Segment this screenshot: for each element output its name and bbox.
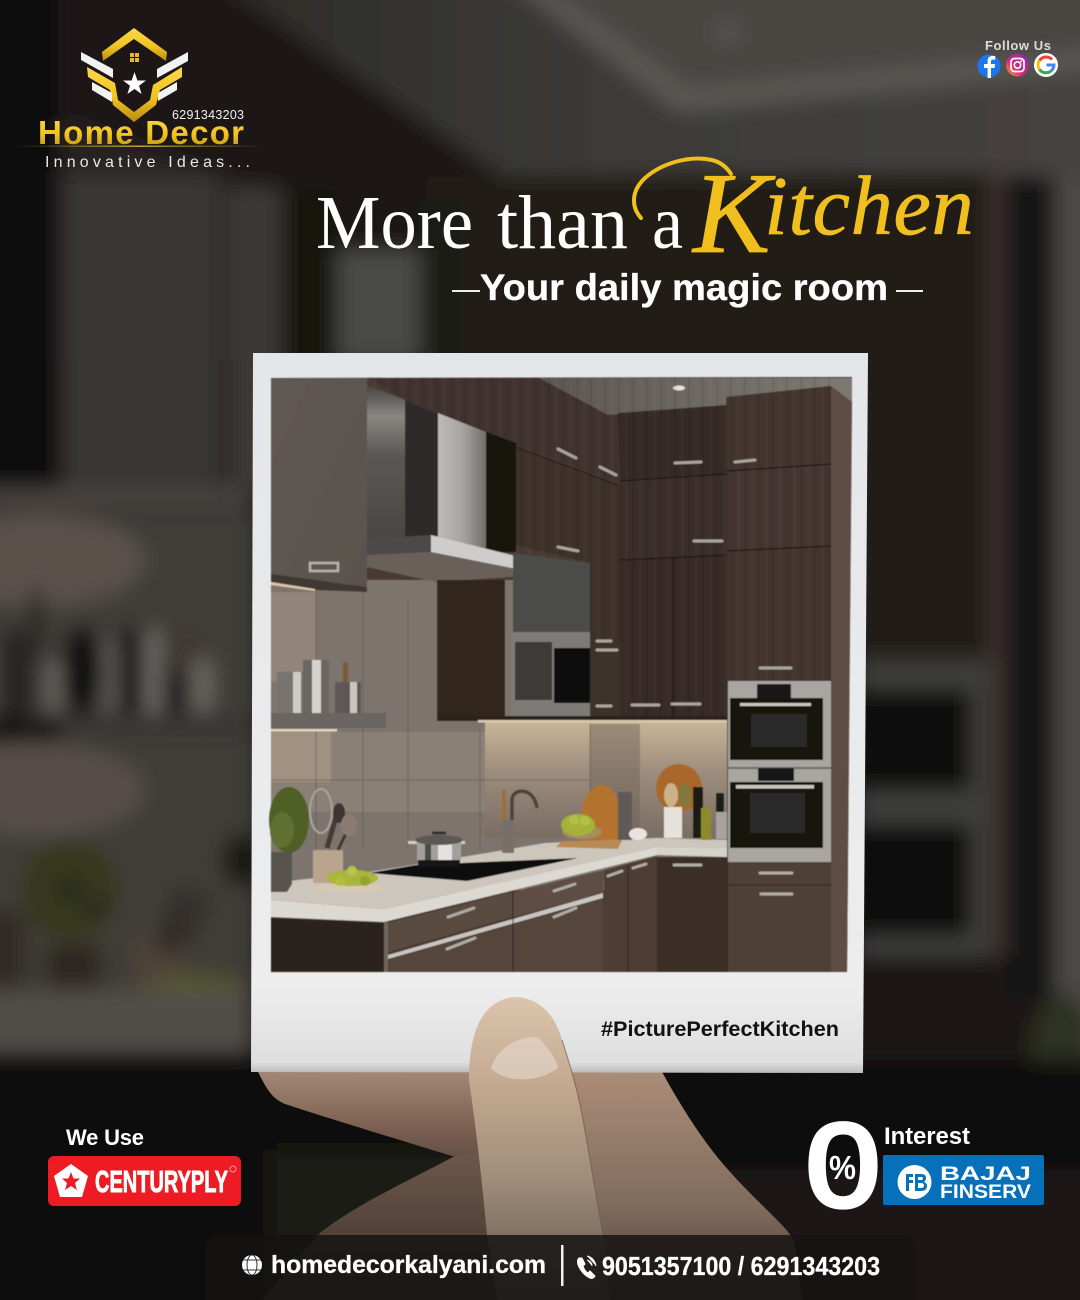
thumb over the card (469, 997, 610, 1300)
logo name: Home Decor (38, 114, 244, 151)
phone numbers: 9051357100 / 6291343203 (602, 1251, 880, 1281)
title line: More than a: a (652, 181, 683, 265)
contact bar (205, 1235, 915, 1300)
Bajaj Finserv logo: BAJAJ (940, 1164, 1031, 1185)
logo phone number: 6291343203 (172, 108, 244, 122)
logo tagline: Innovative Ideas... (45, 154, 250, 171)
icon: facebook (978, 54, 1000, 78)
title line: More than a: than (497, 181, 628, 265)
CenturyPly logo: CENTURYPLY (95, 1164, 228, 1199)
interest label: Interest (884, 1123, 970, 1150)
title script word: Kitchen: K (691, 150, 776, 278)
follow us label: Follow Us (985, 38, 1051, 53)
logo emblem (81, 28, 188, 122)
we use label: We Use (66, 1125, 144, 1150)
title script word: Kitchen: itchen (764, 160, 974, 253)
website: homedecorkalyani.com (271, 1251, 546, 1279)
CenturyPly logo (48, 1156, 241, 1206)
kitchen photograph (269, 377, 852, 972)
subtitle: Your daily magic room (480, 267, 888, 308)
icon: globe (242, 1255, 262, 1275)
polaroid photo card (251, 353, 868, 1073)
icon: google (1034, 53, 1058, 77)
big zero percent: 0 (806, 1100, 880, 1232)
Bajaj Finserv logo: FINSERV (940, 1182, 1031, 1203)
hand holding the photo card (257, 1070, 802, 1300)
zero percent interest offer (806, 1100, 1044, 1232)
icon: phone (578, 1256, 596, 1278)
social links (978, 38, 1058, 78)
title (316, 150, 974, 308)
icon: instagram (1006, 54, 1029, 76)
logo: Home Decor (15, 28, 265, 171)
hashtag caption: #PicturePerfectKitchen (601, 1018, 839, 1041)
title line: More than a: More (316, 181, 473, 265)
Bajaj Finserv logo (883, 1155, 1044, 1205)
we use: CenturyPly badge (48, 1125, 241, 1206)
big zero percent: % (829, 1149, 856, 1186)
title script word: Kitchen (634, 150, 974, 278)
